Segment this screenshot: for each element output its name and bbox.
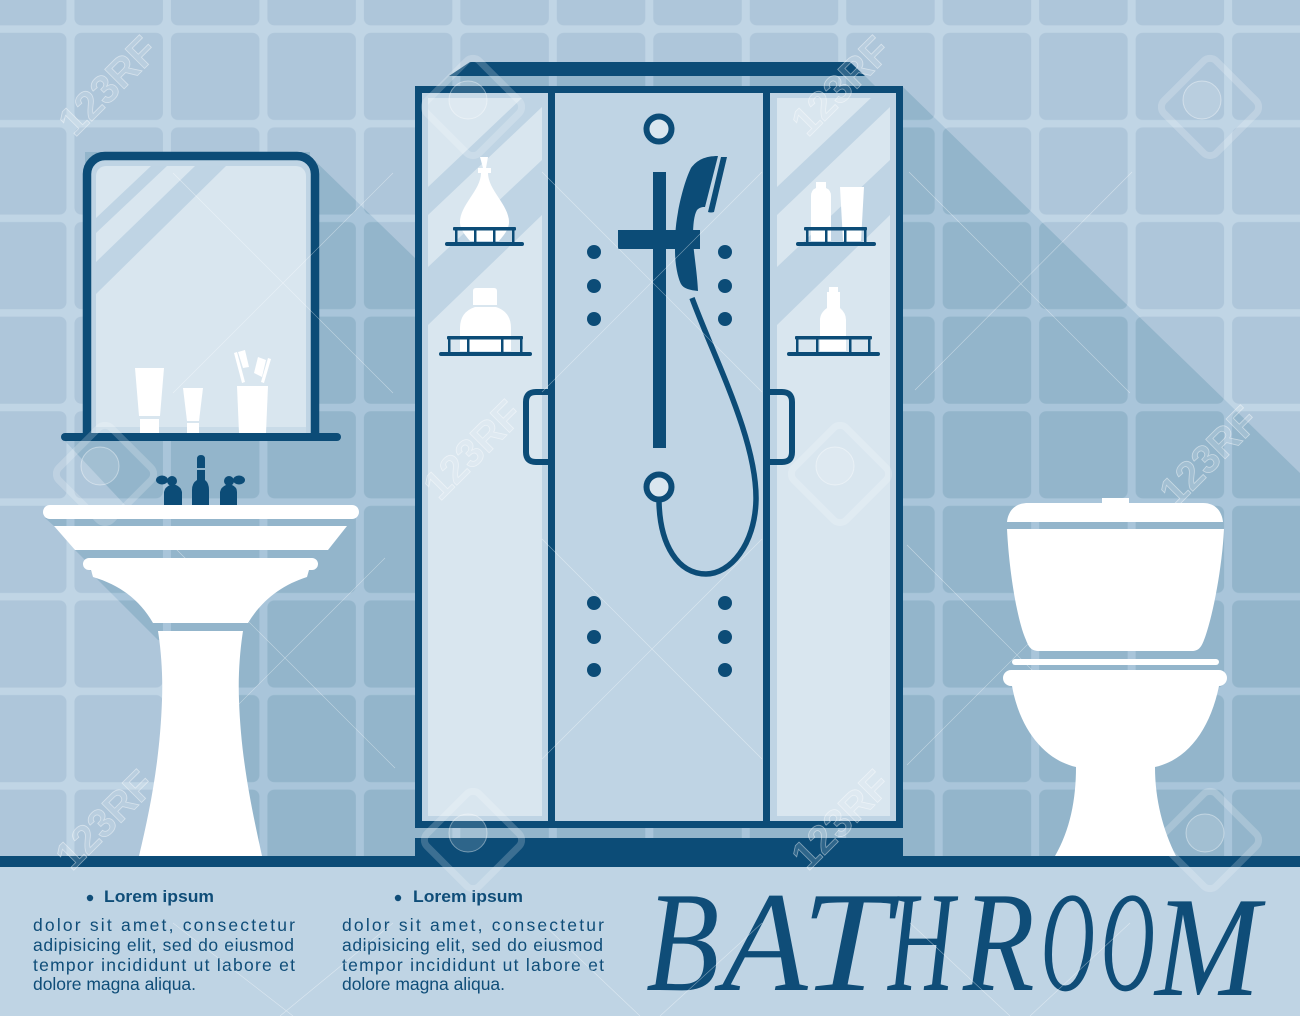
top ring bbox=[646, 116, 672, 142]
pedestal column bbox=[139, 631, 262, 856]
column 1 heading: Lorem ipsum bbox=[104, 887, 214, 906]
bowl bbox=[1003, 670, 1227, 856]
cabin back panel bbox=[415, 86, 903, 828]
bottom caption panel bbox=[0, 867, 1300, 1016]
shelf items lower right: bottle bbox=[820, 287, 846, 351]
cistern lid bbox=[1007, 498, 1223, 522]
watermark logo text: 123RF bbox=[415, 392, 531, 508]
cabin frame bbox=[418, 90, 900, 824]
jets bbox=[587, 245, 732, 677]
shower fittings bbox=[587, 116, 756, 677]
faucet and taps bbox=[156, 455, 245, 505]
column 1 body: tempor incididunt ut labore et bbox=[33, 955, 295, 975]
shower head bbox=[675, 156, 727, 291]
bullet bbox=[87, 895, 93, 901]
shelf lower left bbox=[439, 336, 532, 356]
shelf upper left bbox=[445, 227, 524, 246]
shelf upper right bbox=[796, 227, 876, 246]
mirror bbox=[61, 156, 341, 441]
shelf lower right bbox=[787, 336, 880, 356]
column 2 heading: Lorem ipsum bbox=[413, 887, 523, 906]
watermark logo text: 123RF bbox=[47, 762, 163, 878]
shelf items upper right: bottle and tube bbox=[811, 182, 864, 241]
column 1 body: dolore magna aliqua. bbox=[33, 974, 196, 994]
column 1 body: dolor sit amet, consectetur bbox=[33, 915, 295, 935]
column 1 body bbox=[33, 915, 295, 994]
mirror toiletries bbox=[135, 350, 271, 433]
shelf items upper left: decanter bbox=[460, 157, 509, 241]
seat bbox=[1012, 659, 1219, 665]
left door handle bbox=[526, 392, 548, 462]
toilet bbox=[1003, 498, 1227, 856]
column 2 body: tempor incididunt ut labore et bbox=[342, 955, 604, 975]
floor line bbox=[0, 856, 1300, 867]
watermark logo text: 123RF bbox=[783, 28, 899, 144]
text column 2 bbox=[342, 887, 604, 994]
column 2 body: dolor sit amet, consectetur bbox=[342, 915, 604, 935]
rail bracket bbox=[618, 230, 700, 249]
watermark stamps bbox=[53, 55, 1262, 892]
hose bbox=[659, 298, 756, 574]
shower cabin bbox=[415, 62, 903, 856]
watermark logo text: 123RF bbox=[50, 28, 166, 144]
column 2 body: dolore magna aliqua. bbox=[342, 974, 505, 994]
left glass door bbox=[428, 98, 542, 816]
sink bbox=[43, 455, 359, 856]
column 1 body: adipisicing elit, sed do eiusmod bbox=[33, 935, 294, 955]
cistern bbox=[1007, 529, 1224, 651]
shower roof bbox=[449, 62, 865, 76]
watermark logo text: 123RF bbox=[1151, 398, 1267, 514]
shower rail bbox=[653, 172, 666, 448]
right door handle bbox=[770, 392, 792, 462]
shelf items lower left: jar bbox=[460, 288, 511, 351]
watermark crossing lines bbox=[173, 172, 1132, 1016]
mirror glass bbox=[87, 156, 315, 436]
long shadow on wall bbox=[45, 76, 1300, 856]
right glass door bbox=[777, 98, 890, 816]
pedestal capital bbox=[83, 558, 318, 623]
mirror frame bbox=[87, 156, 315, 436]
bullet bbox=[395, 895, 401, 901]
basin bbox=[43, 505, 359, 856]
text column 1 bbox=[33, 887, 295, 994]
watermark logo text: 123RF bbox=[783, 762, 899, 878]
column 2 body: adipisicing elit, sed do eiusmod bbox=[342, 935, 603, 955]
mirror shelf bbox=[61, 433, 341, 441]
column 2 body bbox=[342, 915, 604, 994]
shower base bbox=[415, 838, 903, 856]
watermark logo text bbox=[47, 28, 1267, 878]
title bbox=[646, 862, 1266, 1016]
bottom ring bbox=[646, 474, 672, 500]
